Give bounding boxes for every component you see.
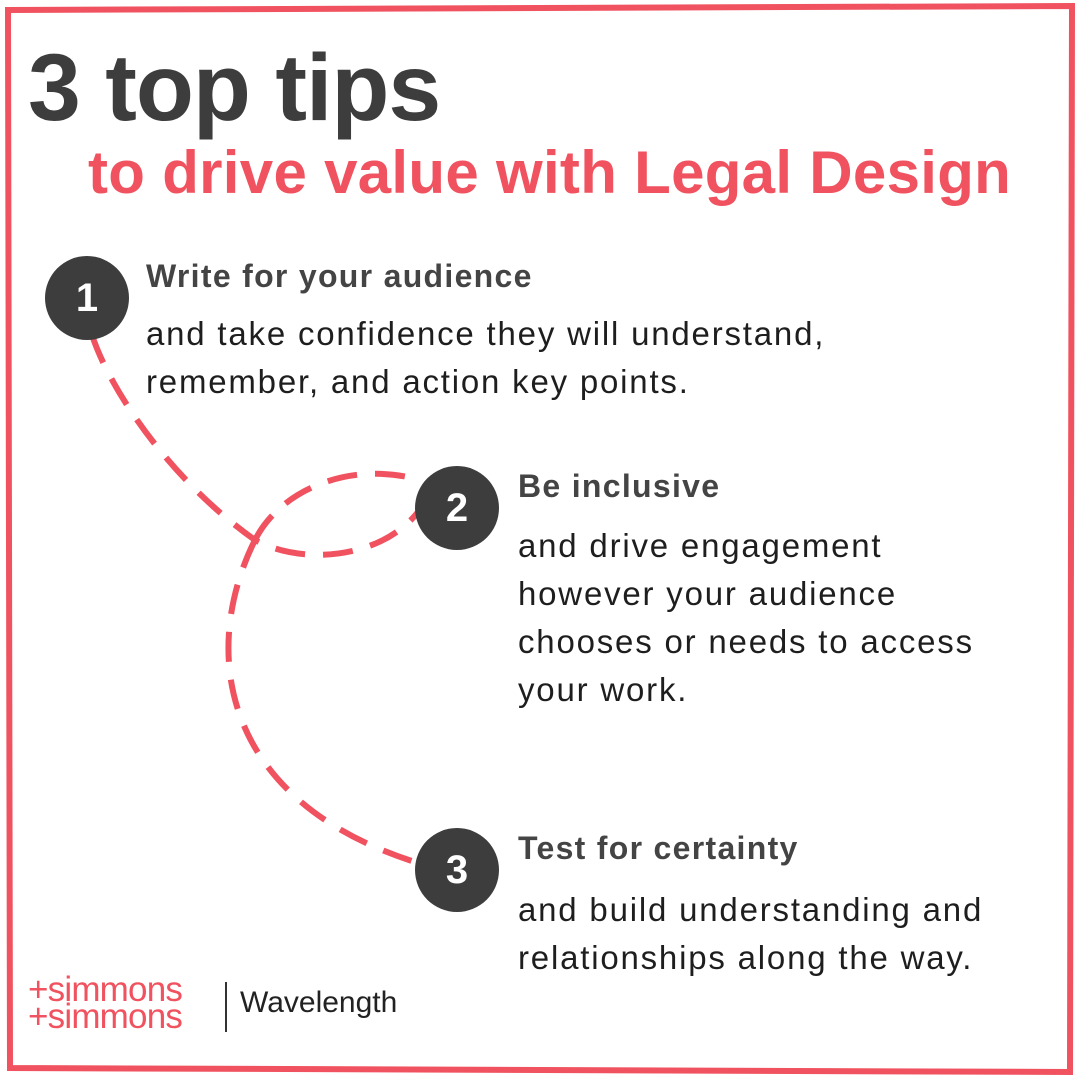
heading 2: Be inclusive: [518, 468, 720, 504]
body 1: and take confidence they will understand,: [146, 315, 825, 352]
icon: number 3: [415, 828, 499, 912]
heading 1: Write for your audience: [146, 258, 533, 294]
icon: number 1: [45, 256, 129, 340]
dashed connector: [92, 335, 420, 862]
heading 3: Test for certainty: [518, 830, 799, 866]
body 2: chooses or needs to access: [518, 623, 974, 660]
tip 1: [45, 256, 825, 400]
body 3: [518, 891, 983, 976]
body 2: however your audience: [518, 575, 897, 612]
icon: number 2: [415, 466, 499, 550]
body 3: relationships along the way.: [518, 939, 973, 976]
logo: [28, 970, 397, 1036]
icon: number 1: 1: [76, 276, 98, 320]
body 3: and build understanding and: [518, 891, 983, 928]
body 1: remember, and action key points.: [146, 363, 690, 400]
icon: number 2: 2: [446, 486, 468, 530]
body 1: [146, 315, 825, 400]
body 2: [518, 527, 974, 708]
logo: Wavelength: [240, 986, 397, 1019]
logo: +simmons: [28, 997, 182, 1036]
tip 2: [415, 466, 974, 708]
subtitle: to drive value with Legal Design: [88, 139, 1011, 206]
icon: number 3: 3: [446, 848, 468, 892]
logo: +simmons: [28, 970, 182, 1009]
tip 3: [415, 828, 983, 976]
title: 3 top tips: [28, 35, 440, 141]
body 2: and drive engagement: [518, 527, 882, 564]
body 2: your work.: [518, 671, 688, 708]
